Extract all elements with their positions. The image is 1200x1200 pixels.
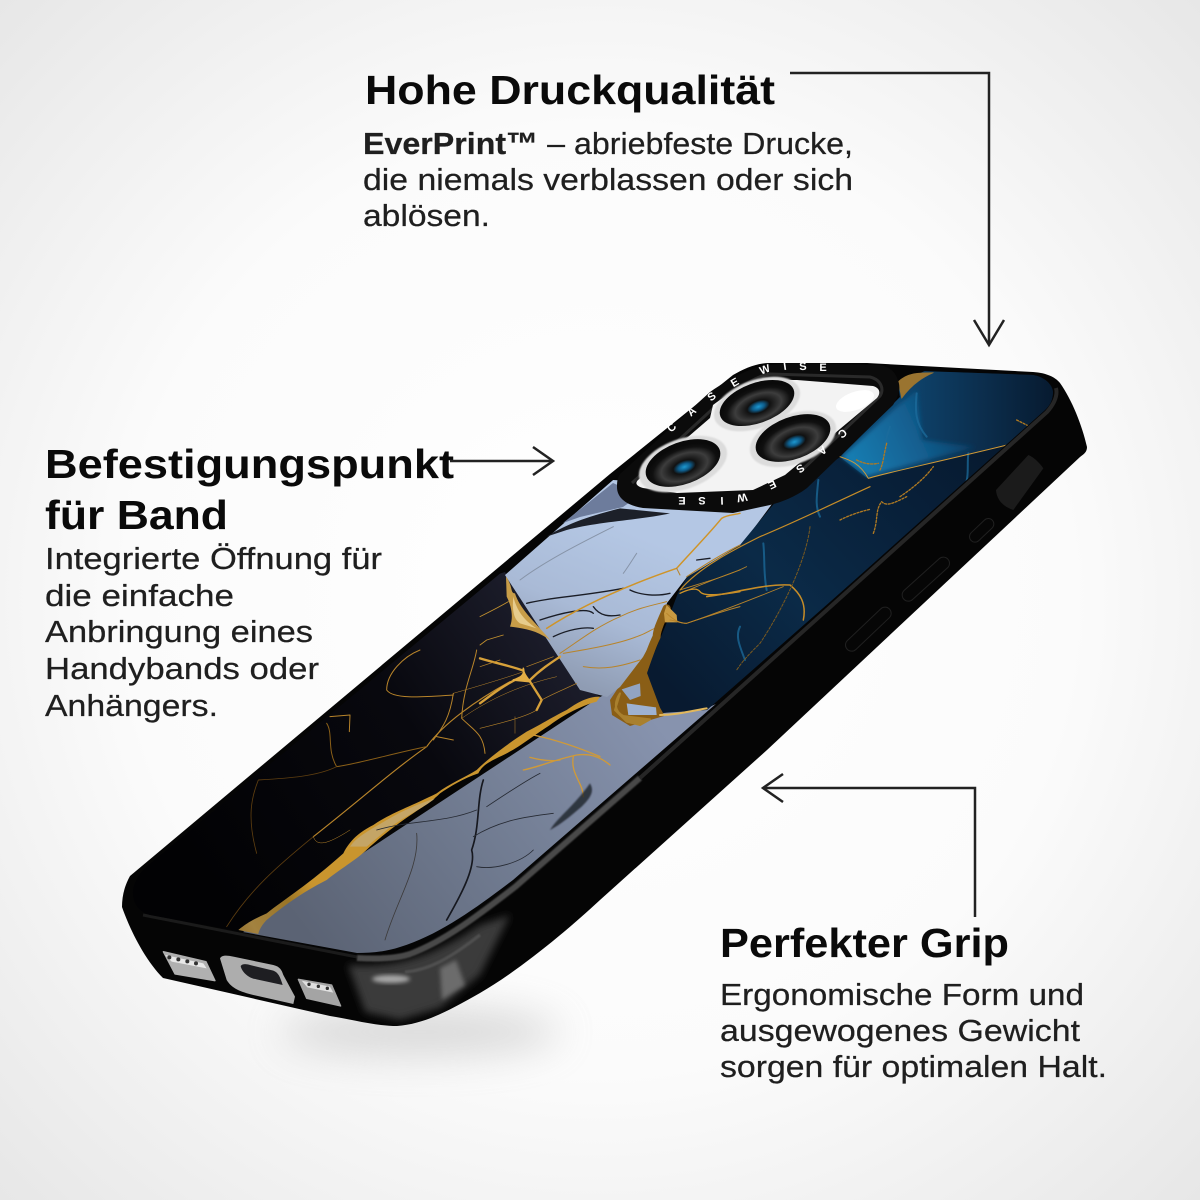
bottom ports xyxy=(163,952,341,1006)
ring lettering: E xyxy=(678,494,686,506)
ring lettering: C xyxy=(835,426,849,440)
lens 2 xyxy=(742,400,844,478)
ring lettering: A xyxy=(815,443,829,457)
text block: die einfache xyxy=(45,578,234,613)
camera island xyxy=(617,361,899,513)
pale islets xyxy=(627,703,657,715)
side switch xyxy=(996,455,1043,510)
text block: sorgen für optimalen Halt. xyxy=(720,1049,1107,1084)
ring lettering: W xyxy=(758,362,773,377)
veins and gold detail on pale marble xyxy=(480,508,740,728)
text block: Anbringung eines xyxy=(45,614,313,649)
callout: Befestigungspunkt xyxy=(45,441,454,723)
side buttons xyxy=(852,455,1043,645)
ring lettering: E xyxy=(729,376,741,390)
veins on navy marble xyxy=(667,373,1030,670)
black vein band xyxy=(547,508,670,537)
ring lettering: W xyxy=(735,490,748,504)
heading: für Band xyxy=(45,492,228,538)
gold seam xyxy=(238,697,600,934)
text block: die niemals verblassen oder sich xyxy=(363,162,853,197)
navy streaks xyxy=(738,393,968,660)
marble: grey lower area xyxy=(243,689,716,953)
black marble Y vein xyxy=(480,657,560,710)
ring lettering: E xyxy=(766,477,778,491)
ring lettering: E xyxy=(819,362,827,374)
text block: ausgewogenes Gewicht xyxy=(720,1013,1080,1048)
text block: ablösen. xyxy=(363,198,490,233)
marble: black area xyxy=(120,572,600,934)
ring lettering: I xyxy=(783,361,787,373)
gold veins on navy xyxy=(680,570,740,593)
gold backing between marble slabs xyxy=(610,626,664,726)
ring lettering: S xyxy=(698,494,706,506)
phone case xyxy=(120,361,1087,1026)
callout: Hohe Druckqualität xyxy=(363,67,853,233)
lens 1 xyxy=(707,366,807,442)
action button xyxy=(975,524,988,537)
gold veins xyxy=(547,513,740,628)
ring lettering: I xyxy=(720,494,724,506)
text block: EverPrint™ – abriebfeste Drucke, xyxy=(363,126,853,161)
left speaker grille xyxy=(163,952,215,981)
heading: Hohe Druckqualität xyxy=(365,67,775,113)
text block xyxy=(363,126,853,233)
arrow: top callout to case xyxy=(790,73,1004,345)
ring lettering: C xyxy=(665,421,679,435)
marble: pale blue area xyxy=(505,480,790,697)
text block xyxy=(720,977,1107,1084)
heading: Befestigungspunkt xyxy=(45,441,454,487)
heading: Perfekter Grip xyxy=(720,920,1009,966)
marble: bright blue wedge xyxy=(842,390,975,476)
text block: Integrierte Öffnung für xyxy=(45,541,382,576)
arrow: left callout to camera xyxy=(450,447,553,475)
ring lettering: S xyxy=(794,461,806,475)
right speaker grille xyxy=(298,979,341,1006)
lens 3 xyxy=(631,425,735,503)
USB port xyxy=(220,956,295,1004)
text block xyxy=(45,541,382,723)
gold seam on navy edge xyxy=(646,604,671,672)
marble: navy area xyxy=(647,372,1060,713)
text block: Anhängers. xyxy=(45,688,218,723)
heading xyxy=(45,441,454,538)
ring lettering xyxy=(665,361,849,506)
volume button lower xyxy=(852,613,885,645)
callout: Perfekter Grip xyxy=(720,920,1107,1084)
text block: Handybands oder xyxy=(45,651,319,686)
ring lettering: S xyxy=(799,361,807,373)
camera plate xyxy=(636,380,879,493)
gold blob at black marble corner xyxy=(506,577,551,641)
rim highlight xyxy=(143,388,1057,959)
ring lettering: A xyxy=(685,405,699,419)
ring inner shade xyxy=(632,374,882,483)
volume button upper xyxy=(908,563,943,595)
marble back xyxy=(120,370,1060,960)
gold veins on black xyxy=(227,650,557,927)
veins on grey area xyxy=(377,735,610,940)
text block: Ergonomische Form und xyxy=(720,977,1084,1012)
arrow: bottom callout to side xyxy=(763,774,975,917)
phone drop shadow xyxy=(280,1008,560,1056)
glossy lower corner xyxy=(348,915,510,1020)
case body xyxy=(122,363,1087,1026)
marble: upper blue area xyxy=(840,370,1056,478)
gold strip xyxy=(660,708,707,715)
ring lettering: S xyxy=(705,390,719,404)
